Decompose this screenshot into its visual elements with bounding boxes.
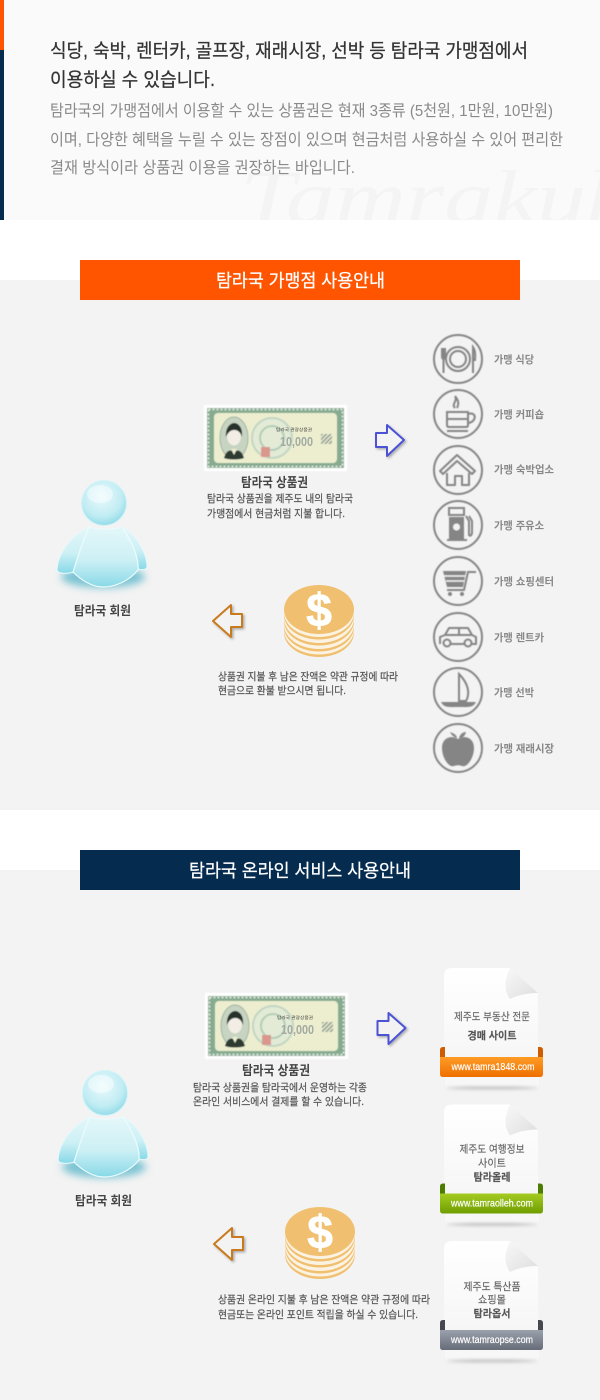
voucher title: 탐라국 상품권	[241, 475, 308, 490]
voucher description: 온라인 서비스에서 결제를 할 수 있습니다.	[193, 1096, 364, 1108]
watermark: Tamrakuk	[240, 156, 600, 240]
icon: sailboat	[434, 668, 482, 716]
card text	[460, 1144, 525, 1184]
member label: 탐라국 회원	[75, 1194, 132, 1208]
panel: affiliate store guide	[0, 260, 600, 810]
icon: cup	[434, 390, 482, 438]
url ribbon: gray: www.tamraopse.com	[450, 1334, 533, 1346]
card text: 제주도 특산품	[464, 1281, 521, 1293]
voucher description: 가맹점에서 현금처럼 지불 합니다.	[207, 507, 345, 520]
panel: online service guide	[0, 850, 600, 1400]
section header: online	[80, 850, 520, 890]
points description: 현금또는 온라인 포인트 적립을 하실 수 있습니다.	[218, 1308, 418, 1321]
url ribbon: green: www.tamraolleh.com	[450, 1198, 533, 1210]
gift voucher: 10,000	[280, 434, 313, 449]
store: boat	[434, 668, 534, 716]
site card: real estate auction	[440, 968, 543, 1090]
card text: 경매 사이트	[468, 1029, 517, 1042]
icon: coins	[284, 584, 354, 657]
points description	[218, 1294, 430, 1321]
heading	[50, 40, 528, 91]
body text: 탐라국의 가맹점에서 이용할 수 있는 상품권은 현재 3종류 (5천원, 1만원, 10만원)	[50, 102, 553, 120]
card text: 제주도 부동산 전문	[454, 1011, 530, 1023]
label: 가맹 재래시장	[494, 742, 554, 755]
store: coffee shop	[434, 390, 544, 438]
points description: 상품권 온라인 지불 후 남은 잔액은 약관 규정에 따라	[218, 1294, 430, 1306]
store: market	[434, 724, 554, 772]
heading: 식당, 숙박, 렌터카, 골프장, 재래시장, 선박 등 탐라국 가맹점에서	[50, 40, 528, 62]
icon: cart	[434, 557, 482, 605]
card text: 탐라올레	[474, 1170, 510, 1184]
card text: 쇼핑몰	[478, 1294, 506, 1306]
gift voucher	[205, 993, 348, 1059]
change description	[218, 671, 398, 697]
store: shopping center	[434, 557, 554, 605]
store: restaurant	[434, 335, 534, 383]
icon: coins	[285, 1206, 355, 1279]
section header: online: 탐라국 온라인 서비스 사용안내	[189, 861, 411, 881]
site card: specialty shopping mall	[440, 1241, 543, 1363]
body text	[50, 102, 563, 177]
arrow: change back	[213, 605, 242, 637]
heading: 이용하실 수 있습니다.	[50, 69, 215, 91]
label: 가맹 식당	[494, 353, 534, 366]
accent bar: navy	[0, 50, 4, 220]
change description: 현금으로 환불 받으시면 됩니다.	[218, 684, 346, 697]
gift voucher: 탐라국 관광상품권	[277, 1014, 313, 1020]
icon: apple	[434, 724, 482, 772]
icon: fuel pump	[434, 501, 482, 549]
gift voucher: 10,000	[281, 1022, 314, 1037]
icon: plate	[434, 335, 482, 383]
card text	[454, 1011, 530, 1042]
store: lodging	[434, 446, 554, 494]
store: gas station	[434, 501, 544, 549]
arrow: to sites	[378, 1013, 406, 1044]
label: 가맹 선박	[494, 686, 534, 699]
label: 가맹 주유소	[494, 519, 544, 532]
panel: intro	[0, 0, 600, 240]
gift voucher: 탐라국 관광상품권	[276, 426, 312, 432]
label: 가맹 커피숍	[494, 408, 544, 421]
arrow: to stores	[376, 425, 404, 456]
icon: member	[58, 1070, 148, 1178]
voucher description	[193, 1081, 367, 1108]
voucher description: 탐라국 상품권을 제주도 내의 탐라국	[207, 493, 353, 505]
label: 가맹 숙박업소	[494, 463, 554, 476]
arrow: points back	[214, 1228, 243, 1260]
voucher title: 탐라국 상품권	[242, 1063, 310, 1078]
card text	[464, 1281, 521, 1320]
section header: affiliate	[80, 260, 520, 300]
site card: travel information	[440, 1104, 543, 1226]
gift voucher	[204, 405, 347, 471]
label: 가맹 렌트카	[494, 631, 544, 644]
icon: car	[434, 613, 482, 661]
card text: 탐라옵서	[474, 1307, 510, 1320]
change description: 상품권 지불 후 남은 잔액은 약관 규정에 따라	[218, 671, 398, 683]
icon: house	[434, 446, 482, 494]
voucher description	[207, 493, 353, 520]
card text: 제주도 여행정보	[460, 1144, 525, 1156]
icon: member	[57, 480, 147, 588]
card text: 사이트	[478, 1158, 506, 1170]
store: rental car	[434, 613, 544, 661]
icon: coins: $	[307, 1206, 333, 1258]
member label: 탐라국 회원	[74, 604, 131, 618]
body text: 이며, 다양한 혜택을 누릴 수 있는 장점이 있으며 현금처럼 사용하실 수 있어 편리한	[50, 131, 563, 149]
accent bar: orange	[0, 0, 4, 50]
voucher description: 탐라국 상품권을 탐라국에서 운영하는 각종	[193, 1081, 367, 1094]
icon: coins: $	[306, 584, 332, 636]
body text: 결재 방식이라 상품권 이용을 권장하는 바입니다.	[50, 159, 355, 177]
url ribbon: orange: www.tamra1848.com	[451, 1061, 535, 1073]
section header: affiliate: 탐라국 가맹점 사용안내	[216, 271, 385, 291]
label: 가맹 쇼핑센터	[494, 575, 554, 588]
